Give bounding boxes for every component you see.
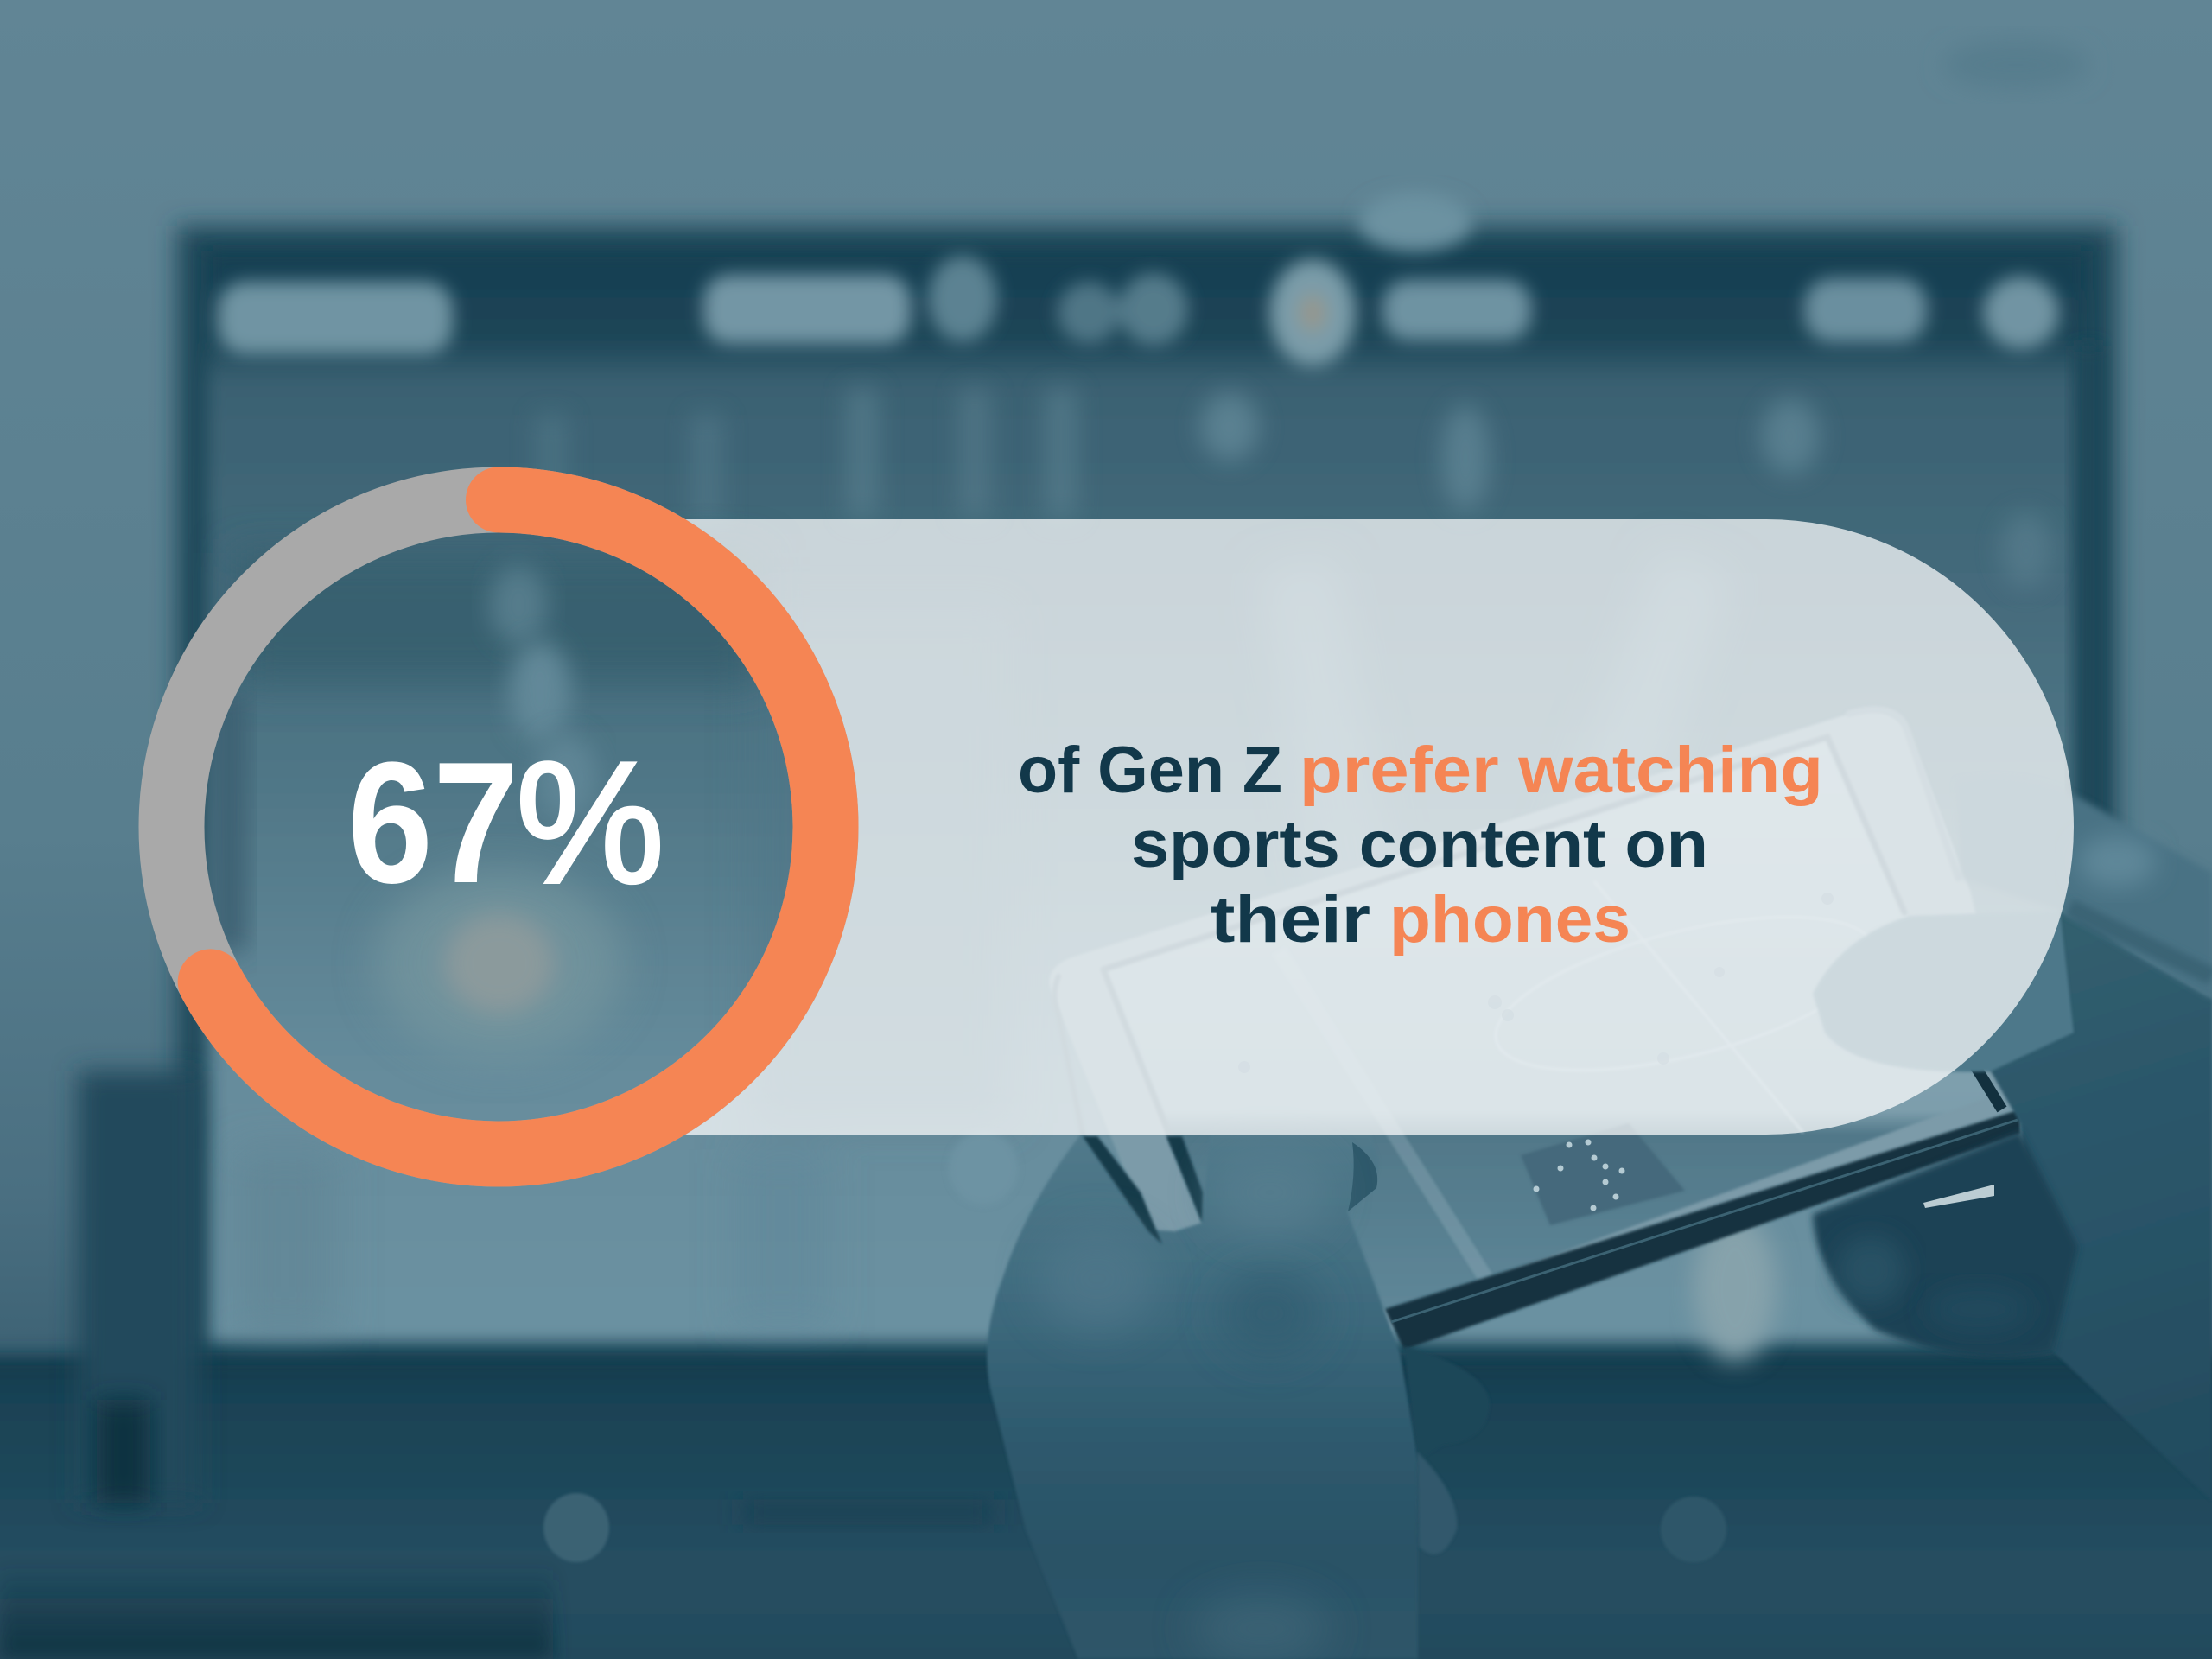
left hand lower fingers xyxy=(1404,1346,1490,1460)
TV base and table xyxy=(0,1355,2212,1659)
statement text: sports content on xyxy=(1131,808,1708,881)
right bezel shading xyxy=(2074,346,2103,1348)
left hand xyxy=(987,1132,1418,1659)
phone body xyxy=(1049,710,2022,1331)
phone bottom edge xyxy=(1385,1109,2020,1350)
right hand upper finger xyxy=(1957,779,2212,999)
right hand xyxy=(1979,911,2212,1501)
TV screen: player blob and glow inside ring xyxy=(212,553,760,1058)
statement text xyxy=(1018,734,1823,957)
phone inner and outer edge lines xyxy=(1054,709,1958,1149)
donut chart: 67 percent xyxy=(171,499,826,1154)
statement text: their xyxy=(1211,883,1370,957)
phone pitch lines xyxy=(1279,881,1889,1279)
phone corner xyxy=(1971,1059,2002,1109)
big number: 67% xyxy=(347,727,664,919)
TV screen header blobs xyxy=(218,256,2059,366)
TV frame xyxy=(177,226,2117,1367)
donut value arc xyxy=(211,499,825,1154)
statement text: phones xyxy=(1389,883,1630,957)
TV screen pitch tone xyxy=(233,550,1733,1339)
statement text: of Gen Z xyxy=(1018,734,1282,807)
pale reflection below phone xyxy=(1694,1214,1777,1361)
phone on-screen crowd patch xyxy=(1521,1123,1685,1225)
dark speaker at left xyxy=(78,1071,199,1503)
left hand shading xyxy=(1037,1136,1377,1659)
webcam blob xyxy=(1358,193,1472,251)
TV screen xyxy=(207,251,2087,1344)
bokeh dots xyxy=(543,1493,609,1562)
TV screen streaks and dots xyxy=(536,389,2052,588)
donut track xyxy=(171,499,826,1154)
big number: 67%: 67 xyxy=(347,727,518,919)
phone screen xyxy=(1103,737,1987,1313)
right thumb xyxy=(1813,911,2074,1071)
translucent pill panel xyxy=(656,519,2074,1135)
statement text: prefer watching xyxy=(1300,734,1823,807)
right hand fingers below phone xyxy=(1813,1131,2078,1357)
white sliver on phone edge xyxy=(1923,1185,1994,1208)
big number: 67%: % xyxy=(516,727,664,919)
